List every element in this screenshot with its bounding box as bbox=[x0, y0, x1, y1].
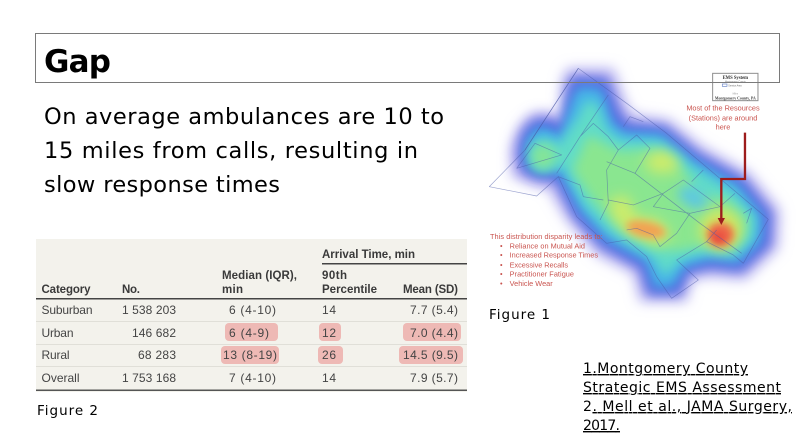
heading: Gap bbox=[44, 44, 111, 80]
figure legend: EMS System: Service Area bbox=[728, 84, 742, 87]
table rows: 6 (4-10) bbox=[229, 303, 276, 317]
table rows: 7.0 (4.4) bbox=[410, 326, 458, 340]
references: 2017. bbox=[583, 418, 620, 434]
table rows: 14 bbox=[322, 303, 336, 317]
references: 2. Mell et al., JAMA Surgery, bbox=[583, 399, 792, 415]
figure legend: EMS System: Montgomery County bbox=[725, 81, 747, 84]
table header: Median (IQR), bbox=[222, 270, 297, 282]
body text: slow response times bbox=[44, 172, 280, 198]
body text: On average ambulances are 10 to bbox=[44, 104, 444, 130]
callout: disparity list: Practitioner Fatigue bbox=[510, 270, 574, 279]
heat layers bbox=[512, 68, 780, 302]
table rows: 7.9 (5.7) bbox=[410, 371, 458, 385]
table rows: 12 bbox=[322, 326, 336, 340]
figure 1 caption: Figure 1 bbox=[489, 307, 550, 323]
callout: disparity list: Reliance on Mutual Aid bbox=[510, 241, 585, 250]
table rows: 1 538 203 bbox=[122, 303, 176, 317]
figure legend: EMS System bbox=[713, 73, 758, 101]
county boundaries bbox=[489, 68, 768, 298]
references: Strategic EMS Assessment bbox=[583, 380, 782, 396]
body text bbox=[44, 104, 444, 198]
table header: min bbox=[222, 284, 243, 296]
table header: No. bbox=[122, 284, 140, 296]
callout: disparity list: • bbox=[500, 260, 503, 269]
row highlights bbox=[221, 323, 463, 364]
table rows: Overall bbox=[42, 371, 80, 385]
table rows: 68 283 bbox=[138, 348, 176, 362]
callout: disparity list: Excessive Recalls bbox=[510, 260, 568, 269]
callout: stations: (Stations) are around bbox=[689, 113, 757, 122]
callout: stations: Most of the Resources bbox=[686, 104, 760, 113]
figure legend: EMS System: EMS System bbox=[723, 76, 748, 81]
table rules bbox=[36, 263, 467, 391]
table rows: 146 682 bbox=[132, 326, 176, 340]
callout: stations: here bbox=[716, 123, 730, 132]
figure legend: EMS System: Montgomery County, PA bbox=[715, 97, 756, 101]
table rows: 14.5 (9.5) bbox=[403, 348, 458, 362]
table header: Category bbox=[42, 284, 91, 296]
table rows: 1 753 168 bbox=[122, 371, 176, 385]
arrow: to resource cluster bbox=[718, 133, 745, 225]
callout: disparity list bbox=[490, 232, 603, 288]
table rows: 7.7 (5.4) bbox=[410, 303, 458, 317]
figure 2: data table bbox=[36, 239, 467, 392]
figure legend: EMS System: Miles bbox=[733, 93, 739, 95]
callout: disparity list: • bbox=[500, 241, 503, 250]
table rows: Rural bbox=[42, 348, 70, 362]
references bbox=[583, 361, 792, 434]
table rows: 13 (8-19) bbox=[223, 348, 277, 362]
table rows: Suburban bbox=[42, 303, 92, 317]
table header: 90th bbox=[322, 270, 347, 282]
callout: stations bbox=[686, 104, 760, 132]
callout: disparity list: Vehicle Wear bbox=[510, 279, 553, 288]
callout: disparity list: Increased Response Times bbox=[510, 251, 598, 260]
callout: disparity list: This distribution disparity leads to: bbox=[490, 232, 603, 241]
callout: disparity list: • bbox=[500, 251, 503, 260]
table header bbox=[42, 249, 458, 296]
table rows: Urban bbox=[42, 326, 74, 340]
table header: Arrival Time, min bbox=[322, 249, 415, 261]
table rows: 6 (4-9) bbox=[229, 326, 269, 340]
callout: disparity list: • bbox=[500, 270, 503, 279]
body text: 15 miles from calls, resulting in bbox=[44, 138, 418, 164]
references: 1.Montgomery County bbox=[583, 361, 748, 377]
table rows: 26 bbox=[322, 348, 336, 362]
figure 1: heat map bbox=[489, 68, 780, 302]
callout: disparity list: • bbox=[500, 279, 503, 288]
table rows bbox=[42, 303, 458, 385]
title box bbox=[36, 34, 780, 82]
table background bbox=[36, 239, 467, 392]
table header: Mean (SD) bbox=[403, 284, 458, 296]
table rows: 7 (4-10) bbox=[229, 371, 276, 385]
figure 2 caption: Figure 2 bbox=[37, 403, 98, 419]
table rows: 14 bbox=[322, 371, 336, 385]
table header: Percentile bbox=[322, 284, 377, 296]
